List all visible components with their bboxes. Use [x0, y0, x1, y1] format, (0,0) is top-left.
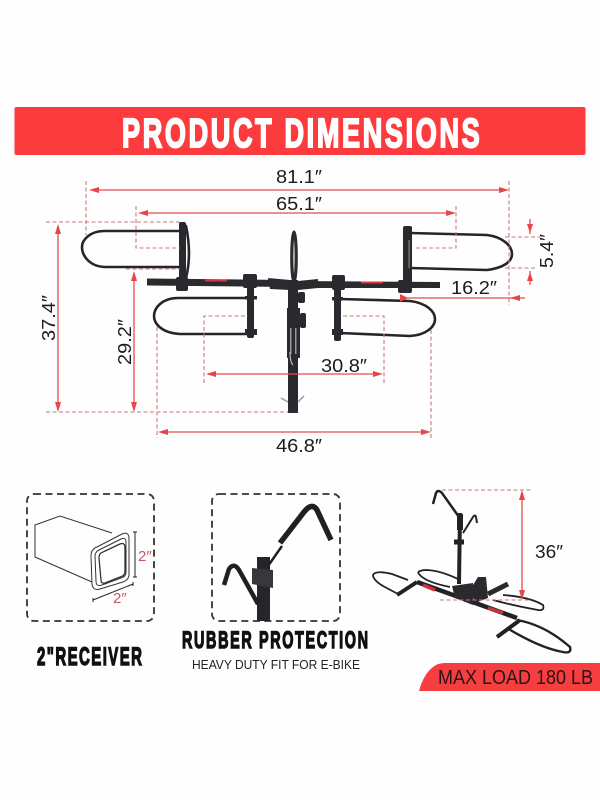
lower left wheel cradle	[154, 278, 257, 338]
title banner	[14, 107, 586, 156]
dimension: 29.2 inch height: 29.2″	[114, 319, 135, 365]
upper left wheel cradle	[82, 222, 189, 280]
icon: receiver tube	[35, 516, 129, 589]
dimension: 30.8 inch spacing	[206, 355, 383, 377]
dimension: 81.1 inch width: 81.1″	[276, 166, 322, 187]
dashed frame	[27, 494, 154, 621]
dimension: 37.4 inch height: 37.4″	[38, 295, 59, 341]
dimension: 36 inch height	[519, 490, 563, 600]
receiver label: 2"RECEIVER	[37, 643, 142, 671]
rubber protection heading: RUBBER PROTECTION	[182, 627, 368, 654]
panel: rubber protection	[212, 494, 340, 621]
panel: 2 inch receiver	[27, 494, 154, 621]
height guide lines	[440, 490, 531, 600]
dimension: 5.4 inch gap: 5.4″	[536, 234, 557, 268]
rack mast and arms	[433, 491, 477, 584]
dimension: 16.2 inch offset	[400, 277, 525, 302]
lower right wheel cradle	[332, 276, 435, 341]
dimension: 65.1 inch width: 65.1″	[276, 193, 322, 214]
horizontal bar	[147, 274, 440, 293]
receiver width dimension: 2″	[113, 590, 127, 607]
dimension: 16.2 inch offset: 16.2″	[451, 277, 497, 298]
upper right wheel cradle	[403, 226, 512, 282]
rack base bar	[417, 577, 517, 618]
folded-out rack perspective view	[373, 490, 570, 652]
dimension: 37.4 inch height	[38, 224, 61, 412]
dimension: 46.8 inch width	[158, 429, 431, 456]
dimension: 30.8 inch spacing: 30.8″	[321, 355, 367, 376]
dimension: 81.1 inch width	[89, 166, 509, 193]
title banner: PRODUCT DIMENSIONS	[122, 112, 480, 156]
dimension: 46.8 inch width: 46.8″	[276, 435, 322, 456]
dimension guide lines	[46, 181, 540, 438]
dimension: 5.4 inch gap	[527, 219, 557, 285]
dashed frame	[212, 494, 340, 621]
dimension: 36 inch height: 36″	[535, 541, 563, 562]
rack wheel trays	[373, 570, 570, 652]
top-view bike rack	[82, 222, 512, 413]
dimension: 29.2 inch height	[114, 271, 137, 412]
receiver height dimension: 2″	[138, 548, 152, 565]
icon: mast and rubber arms	[224, 506, 331, 621]
heavy duty caption: HEAVY DUTY FIT FOR E-BIKE	[192, 658, 360, 672]
centre mast and hitch	[281, 232, 306, 413]
dimension: 65.1 inch width	[138, 193, 456, 216]
